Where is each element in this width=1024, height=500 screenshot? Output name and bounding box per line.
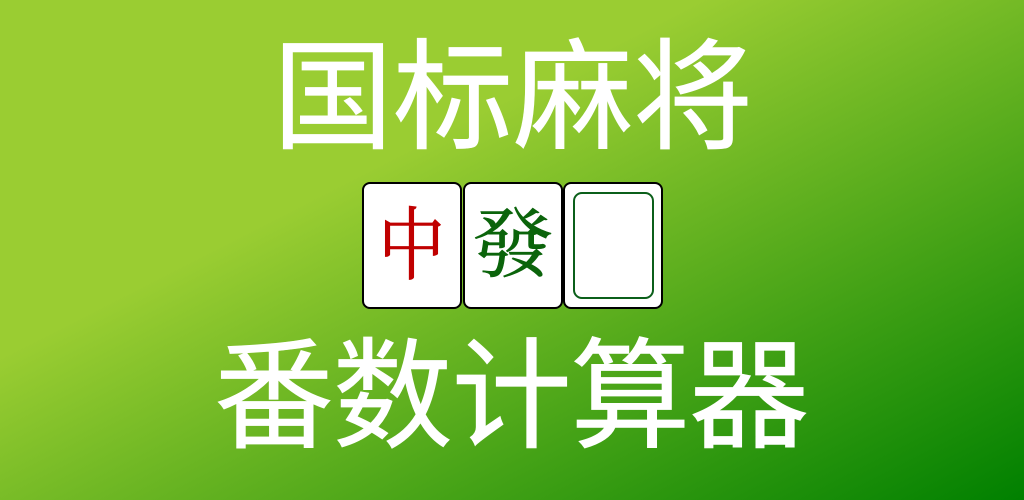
title: top line: 国标麻将 xyxy=(273,31,753,165)
tile: green fa xyxy=(463,182,562,309)
tile: white dragon xyxy=(563,182,662,309)
tile: red zhong xyxy=(362,182,462,309)
title: bottom line: 番数计算器 xyxy=(214,330,808,464)
tile: green fa: 發 xyxy=(472,204,553,288)
tile: red zhong: 中 xyxy=(378,203,445,291)
